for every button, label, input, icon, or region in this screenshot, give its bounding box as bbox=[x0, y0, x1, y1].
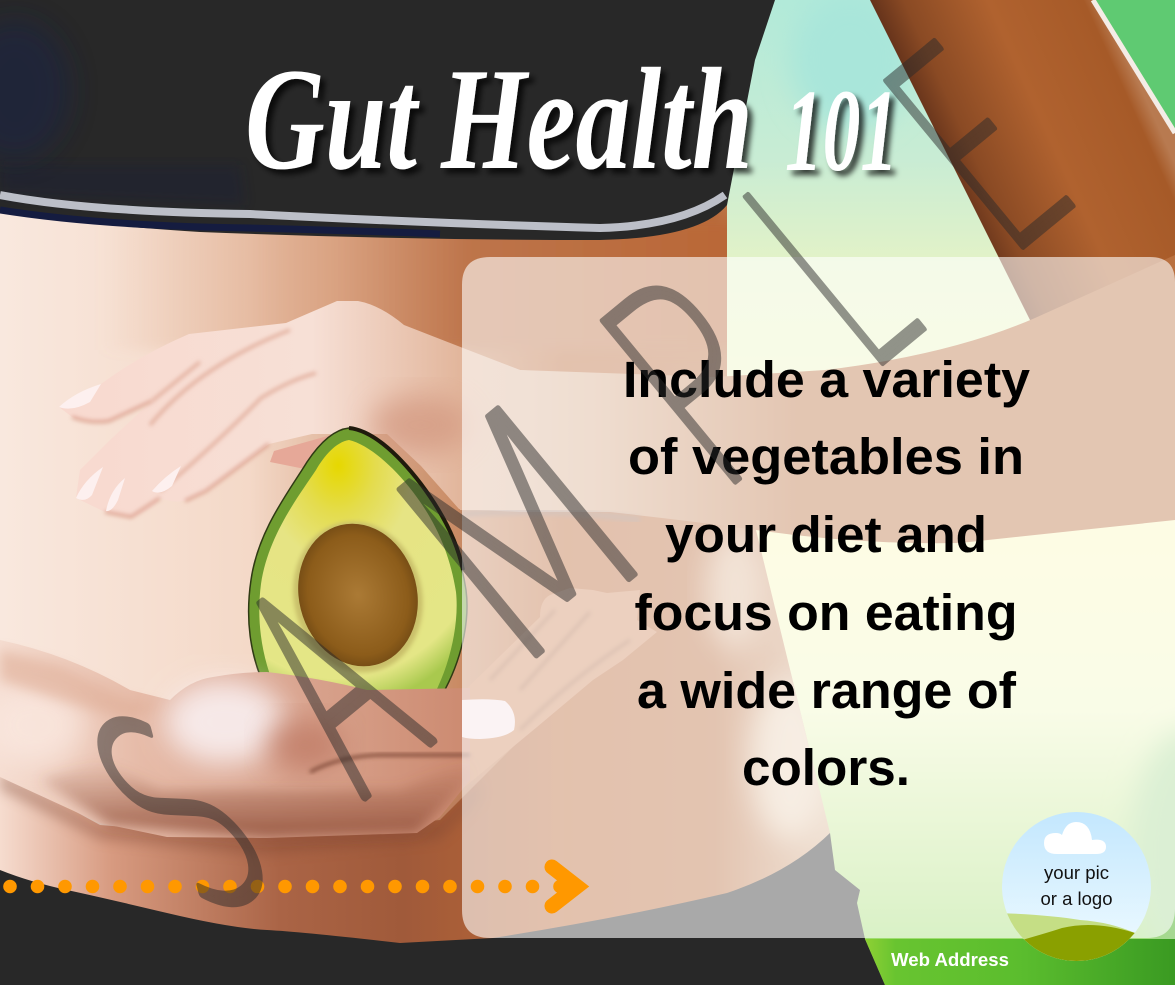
logo placeholder circle bbox=[1000, 812, 1151, 965]
bright strip under card bbox=[865, 939, 1175, 985]
SAMPLE watermark: A bbox=[145, 475, 490, 866]
avocado bbox=[249, 428, 467, 695]
card body text: of vegetables in bbox=[628, 428, 1024, 485]
card body text: a wide range of bbox=[637, 662, 1017, 719]
title: Gut bbox=[245, 38, 420, 200]
torso bbox=[0, 190, 830, 960]
torso shading bbox=[0, 220, 830, 960]
dotted orange arrow bbox=[3, 867, 577, 906]
black top bbox=[0, 0, 775, 240]
SAMPLE watermark: S bbox=[0, 605, 334, 985]
waistband stripes bbox=[0, 195, 725, 228]
web address: Web Address bbox=[891, 950, 1009, 970]
dark raised upper arm bbox=[870, 0, 1175, 340]
avocado seed bbox=[283, 511, 433, 679]
SAMPLE watermark: L bbox=[652, 63, 982, 440]
forearm underside shadow bbox=[462, 512, 640, 520]
SAMPLE watermark: P bbox=[508, 169, 857, 559]
title bbox=[245, 38, 898, 200]
lower hand and arm bbox=[0, 640, 515, 838]
logo caption bbox=[1040, 863, 1112, 909]
card body text: your diet and bbox=[665, 506, 987, 563]
lower hand fingers bbox=[455, 588, 657, 795]
card body text: Include a variety bbox=[623, 351, 1031, 408]
logo caption: your pic bbox=[1044, 863, 1109, 883]
upper hand bbox=[59, 301, 620, 517]
card body text bbox=[623, 351, 1031, 796]
icon: cloud bbox=[1044, 822, 1106, 854]
card body text: colors. bbox=[742, 739, 910, 796]
arm highlight edge bbox=[1093, 0, 1175, 133]
forearm bbox=[460, 255, 1175, 543]
thumbnail bbox=[462, 699, 515, 739]
SAMPLE watermark: M bbox=[298, 293, 709, 738]
title: 101 bbox=[785, 65, 898, 196]
fingernails bbox=[59, 384, 181, 511]
black pants bbox=[0, 833, 885, 985]
translucent text card bbox=[462, 257, 1175, 938]
logo caption: or a logo bbox=[1040, 889, 1112, 909]
card body text: focus on eating bbox=[634, 584, 1018, 641]
title: Health bbox=[439, 38, 753, 200]
